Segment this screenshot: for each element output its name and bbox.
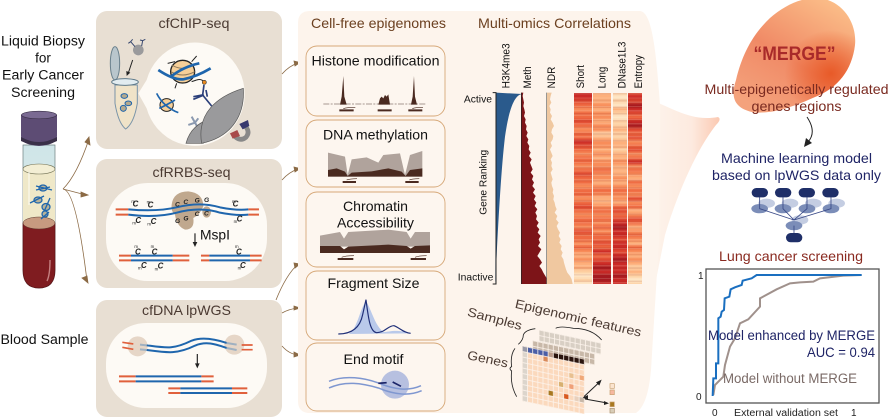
panel: cfRRBS-seq: C	[158, 262, 164, 271]
legend: model without MERGE: Model without MERGE	[723, 371, 857, 386]
panel: cfRRBS-seq: m	[151, 244, 155, 249]
title: liquid biopsy: Screening	[11, 85, 75, 100]
text: multi-epigenetically regulated genes regions: Multi-epigenetically regulated	[704, 81, 888, 97]
label: Epigenomic features: Epigenomic features	[514, 297, 643, 340]
card: chromatin accessibility	[306, 192, 445, 267]
axis labels: 0	[696, 392, 702, 403]
axis labels: 1	[698, 271, 704, 282]
panel: cfRRBS-seq: C	[135, 216, 141, 225]
panel: cfDNA lpWGS	[96, 300, 282, 417]
panel: cfRRBS-seq: C	[135, 248, 141, 257]
heatmap: Short	[574, 93, 592, 284]
blood tube icon	[21, 111, 57, 288]
card: chromatin accessibility: Chromatin	[343, 198, 408, 214]
heading: cell-free epigenomes: Cell-free epigenomes	[311, 15, 446, 31]
card: chromatin accessibility: Accessibility	[337, 214, 414, 230]
panel: cfRRBS-seq: C	[152, 248, 158, 257]
chart: gene ranking bars	[458, 42, 645, 284]
panel: cfChIP-seq: cfChIP-seq	[158, 15, 230, 31]
icon: neural network	[751, 188, 845, 242]
card: histone modification: Histone modification	[312, 52, 440, 68]
label: Samples: Samples	[466, 305, 524, 333]
panel: cfRRBS-seq: m	[134, 244, 138, 249]
title: liquid biopsy: for	[35, 50, 51, 66]
panel: cfRRBS-seq: C	[237, 214, 243, 223]
panel: cfRRBS-seq: m	[138, 266, 142, 271]
heading: multi-omics correlations: Multi-omics Correlations	[478, 15, 631, 31]
panel: cfRRBS-seq: C	[195, 211, 200, 218]
card: DNA methylation: DNA methylation	[323, 126, 428, 142]
panel: cell-free epigenomes and multi-omics background	[298, 11, 660, 413]
panel: cfRRBS-seq: cfRRBS-seq	[152, 164, 230, 180]
label: Active: Active	[464, 95, 492, 106]
label: Gene Ranking: Gene Ranking	[478, 150, 489, 215]
title: liquid biopsy	[1, 34, 85, 100]
text: machine learning model	[712, 150, 881, 183]
panel: cfRRBS-seq: C	[240, 261, 246, 270]
panel: cfRRBS-seq: m	[238, 266, 242, 271]
panel: cfRRBS-seq: m	[132, 221, 136, 226]
heading: lung cancer screening: Lung cancer screening	[719, 248, 863, 264]
panel: cfRRBS-seq: C	[204, 210, 209, 217]
panel: cfRRBS-seq: G	[175, 218, 180, 225]
panel: cfRRBS-seq: C	[141, 261, 147, 270]
panel: cfRRBS-seq: G	[204, 197, 209, 204]
curve: model enhanced by MERGE	[713, 275, 862, 396]
column label: Meth: Meth	[522, 66, 534, 88]
arrows: assays to epigenomes	[276, 61, 300, 357]
card: end motif	[306, 343, 445, 411]
text: machine learning model: Machine learning model	[721, 150, 872, 166]
column label: NDR: NDR	[546, 67, 558, 88]
panel: cfRRBS-seq	[96, 159, 282, 288]
arrow: regions to model	[804, 117, 812, 147]
bars: H3K4me3	[495, 93, 522, 284]
panel: cfRRBS-seq: C	[183, 199, 188, 206]
column label: Long: Long	[597, 67, 609, 88]
heatmap: Entropy	[628, 93, 642, 284]
panel: cfDNA lpWGS: cfDNA lpWGS	[142, 302, 231, 318]
panel: cfRRBS-seq: m	[155, 266, 159, 271]
heatmap: Long	[593, 93, 611, 284]
panel: cfRRBS-seq: m	[147, 222, 151, 227]
card: fragment size: Fragment Size	[328, 275, 420, 291]
label: Inactive: Inactive	[458, 272, 494, 283]
chart: ROC curve	[696, 269, 879, 418]
title: liquid biopsy: Liquid Biopsy	[1, 34, 85, 48]
panel: cfRRBS-seq: m	[234, 219, 238, 224]
title: liquid biopsy: Early Cancer	[2, 68, 85, 82]
curve: model without MERGE	[713, 275, 862, 395]
legend: model enhanced by MERGE: Model enhanced by MERGE	[708, 327, 875, 343]
legend: AUC value: AUC = 0.94	[807, 344, 875, 360]
gene ranking axis bracket	[493, 93, 496, 284]
column label: Entropy: Entropy	[633, 55, 645, 88]
MERGE blob: “MERGE”	[754, 44, 836, 65]
bars: Meth	[521, 93, 550, 284]
arrows: tube to assays	[63, 137, 90, 283]
text: machine learning model: based on lpWGS data only	[712, 167, 881, 183]
panel: cfRRBS-seq: MspI	[200, 228, 230, 243]
panel: cfRRBS-seq: C	[151, 217, 157, 226]
column label: H3K4me3: H3K4me3	[500, 43, 512, 88]
panel: cfRRBS-seq: G	[183, 216, 189, 223]
label: Genes: Genes	[466, 348, 509, 371]
panel: cfRRBS-seq: m	[235, 244, 239, 249]
label: blood sample: Blood Sample	[0, 332, 88, 347]
panel: cfRRBS-seq: C	[175, 201, 180, 208]
card: end motif: End motif	[344, 351, 404, 367]
column label: Short: Short	[575, 65, 587, 88]
column label: DNase1L3: DNase1L3	[616, 42, 628, 88]
card: histone modification	[306, 46, 445, 116]
panel: cfRRBS-seq: m	[131, 199, 135, 204]
panel: cfRRBS-seq: m	[232, 199, 236, 204]
schematic: epigenomic tensor	[466, 297, 643, 414]
funnel toward MERGE	[650, 100, 720, 300]
panel: cfRRBS-seq: C	[236, 248, 242, 257]
panel: cfRRBS-seq: C	[133, 200, 139, 209]
panel: cfChIP-seq	[96, 11, 282, 149]
text: multi-epigenetically regulated genes regions	[704, 81, 888, 114]
card: fragment size	[306, 271, 445, 340]
panel: cfRRBS-seq: m	[147, 200, 151, 205]
panel: cfRRBS-seq: C	[148, 200, 154, 209]
axis labels	[696, 271, 857, 418]
bars: NDR	[547, 93, 573, 284]
panel: cfRRBS-seq: C	[233, 200, 239, 209]
panel: cfRRBS-seq: G	[195, 197, 200, 204]
text: multi-epigenetically regulated genes regions: genes regions	[752, 98, 842, 114]
card: DNA methylation	[306, 120, 445, 187]
MERGE blob	[734, 0, 855, 113]
heatmap: DNase1L3	[613, 93, 627, 284]
